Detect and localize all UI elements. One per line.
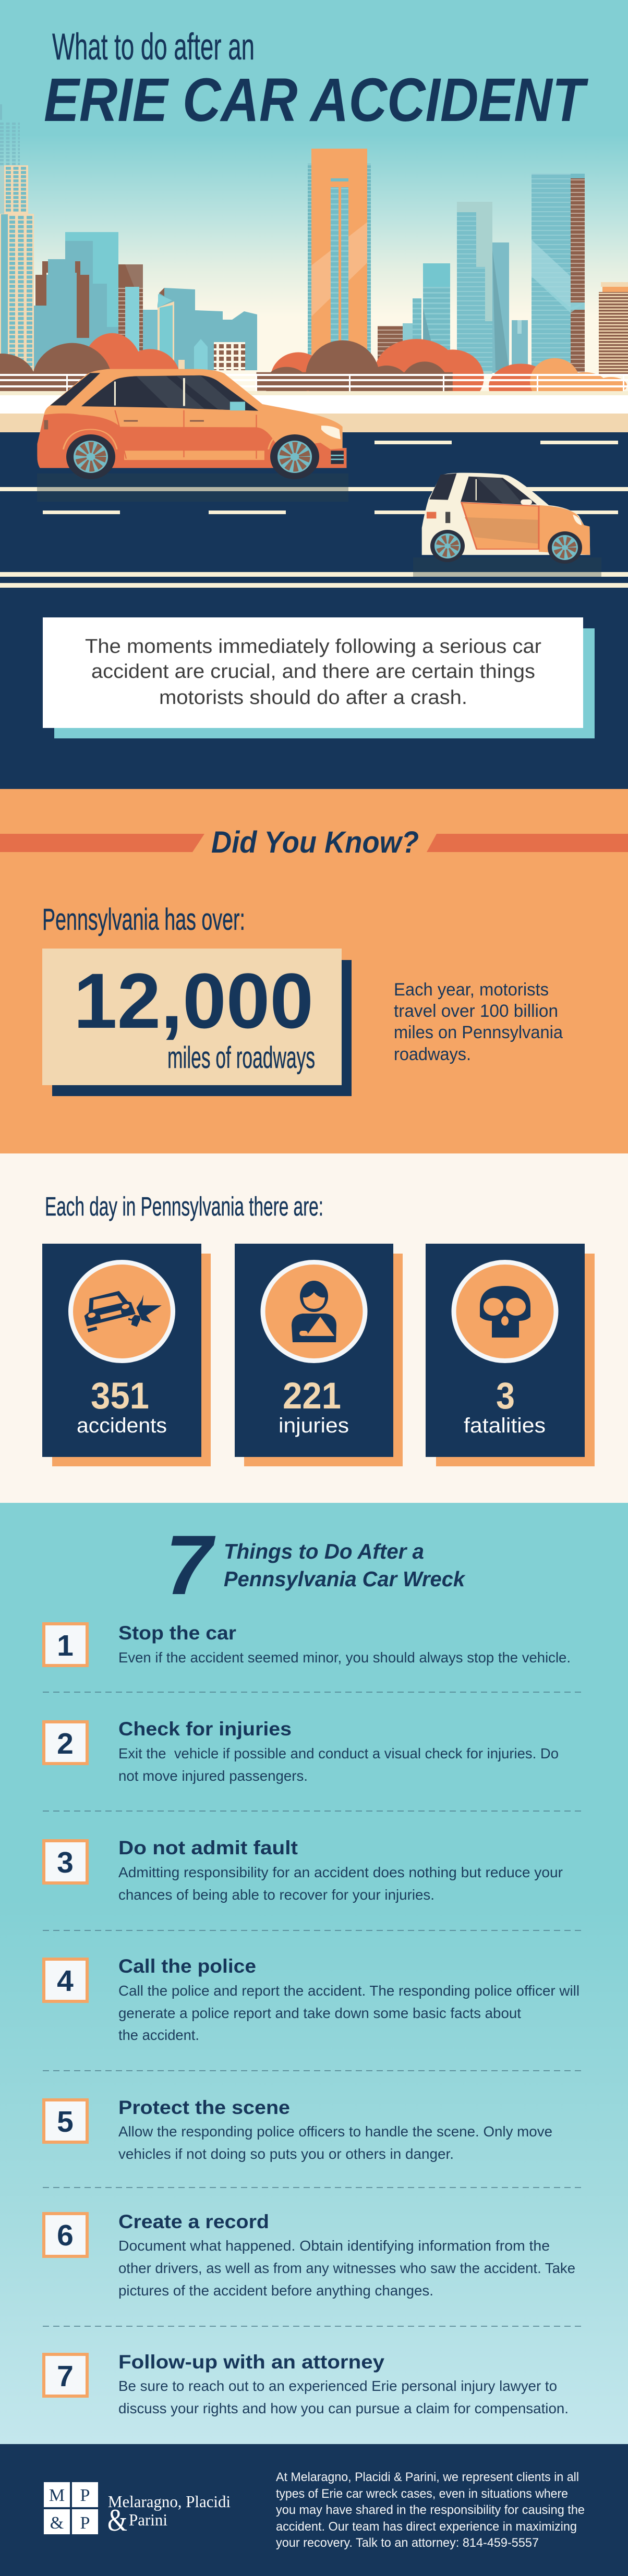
text block: each year — [394, 980, 563, 1064]
step 3: do not admit fault: 3 — [57, 1846, 74, 1879]
stat card: accidents — [42, 1244, 211, 1466]
text block: each year: travel over 100 billion — [394, 1001, 558, 1021]
step 7: follow-up with an attorney — [44, 2351, 569, 2416]
step 4: call the police: 4 — [57, 1964, 74, 1998]
step 1: stop the car — [44, 1622, 571, 1666]
icon: car crash — [84, 1291, 162, 1332]
text block: each year: miles on Pennsylvania — [394, 1023, 563, 1042]
stat card: accidents: accidents — [77, 1414, 167, 1437]
building: orange tower — [308, 149, 371, 373]
stat card: 12,000 miles of roadways — [42, 949, 352, 1096]
step 2: check for injuries: not move injured passengers. — [118, 1768, 308, 1784]
step 6: create a record: pictures of the accident before anything changes. — [118, 2282, 433, 2299]
logo: Melaragno, Placidi & Parini: Parini — [129, 2510, 167, 2529]
stat card: fatalities: fatalities — [464, 1414, 546, 1437]
step 3: do not admit fault — [44, 1837, 563, 1903]
stat card: injuries: 221 — [283, 1376, 341, 1417]
heading: 7 things to do: 7 — [165, 1518, 216, 1612]
panel: intro callout — [43, 617, 595, 738]
text block: intro: motorists should do after a crash. — [159, 687, 467, 709]
stat card: 12,000 miles of roadways: miles of roadways — [167, 1041, 315, 1075]
step 1: stop the car: Even if the accident seemed minor, you should always stop the vehicle. — [118, 1649, 571, 1666]
step 7: follow-up with an attorney: 7 — [57, 2360, 74, 2393]
text block: intro: accident are crucial, and there are certain things — [91, 661, 535, 683]
text block: intro: The moments immediately following a serious car — [85, 636, 541, 658]
road markings — [0, 441, 628, 588]
panel: navy road and intro background — [0, 432, 628, 789]
logo: Melaragno, Placidi & Parini: P — [80, 2486, 90, 2505]
stat card: fatalities: 3 — [496, 1376, 515, 1417]
car shadows — [37, 473, 601, 577]
heading: each day: Each day in Pennsylvania there are: — [45, 1192, 323, 1221]
roadside bands — [0, 391, 628, 432]
step 3: do not admit fault: chances of being able to recover for your injuries. — [118, 1887, 434, 1903]
illustration: large orange car — [37, 369, 346, 479]
panel: hero sky — [0, 0, 628, 396]
step 1: stop the car: Stop the car — [118, 1622, 236, 1644]
building: right small blocks — [378, 263, 450, 360]
step 5: protect the scene: vehicles if not doing so puts you or others in danger. — [118, 2146, 454, 2162]
illustration: small orange and cream car — [422, 473, 590, 564]
step 2: check for injuries: 2 — [57, 1727, 74, 1760]
text block: each year: Each year, motorists — [394, 980, 549, 1000]
step 5: protect the scene: Protect the scene — [118, 2097, 290, 2118]
step 7: follow-up with an attorney: discuss your rights and how you can pursue a claim for compensation. — [118, 2400, 569, 2416]
stat card: accidents: 351 — [91, 1376, 149, 1417]
step 5: protect the scene: Allow the responding police officers to handle the scene. Only move — [118, 2123, 552, 2140]
logo: Melaragno, Placidi & Parini: P — [80, 2513, 90, 2533]
stat card: injuries — [235, 1244, 403, 1466]
step 2: check for injuries: Exit the vehicle if possible and conduct a visual check for injuries. Do — [118, 1745, 559, 1761]
step 6: create a record: Document what happened. Obtain identifying information from the — [118, 2238, 550, 2254]
building: far right — [599, 282, 628, 375]
step 5: protect the scene: 5 — [57, 2105, 74, 2138]
heading: 7 things to do — [165, 1518, 466, 1612]
step 4: call the police: Call the police and report the accident. The responding police officer will — [118, 1983, 579, 1999]
text block: footer about: your recovery. Talk to an attorney: 814-459-5557 — [276, 2536, 539, 2550]
icon: injured person — [292, 1281, 336, 1342]
text block: footer about — [276, 2470, 585, 2550]
building: left tower faded top — [0, 104, 20, 166]
heading: 7 things to do: Things to Do After a — [224, 1539, 424, 1563]
trees — [0, 333, 627, 391]
panel: seven things background — [0, 1503, 628, 2444]
building: middle cluster — [158, 288, 257, 375]
panel: did you know background — [0, 789, 628, 1153]
step 4: call the police: the accident. — [118, 2027, 199, 2043]
step 3: do not admit fault: Admitting responsibility for an accident does nothing but reduce your — [118, 1864, 563, 1880]
panel: footer background — [0, 2444, 628, 2576]
text block: each year: roadways. — [394, 1044, 471, 1064]
building: right tower pair — [457, 202, 528, 374]
step 4: call the police — [44, 1955, 579, 2043]
stat card: injuries: injuries — [279, 1414, 349, 1437]
heading band: did you know — [0, 825, 628, 859]
logo: Melaragno, Placidi & Parini: Melaragno, Placidi — [108, 2492, 231, 2511]
step 4: call the police: generate a police report and take down some basic facts about — [118, 2005, 521, 2021]
fence — [0, 374, 628, 391]
stat card: fatalities — [426, 1244, 595, 1466]
step 1: stop the car: 1 — [57, 1629, 74, 1662]
step 7: follow-up with an attorney: Follow-up with an attorney — [118, 2351, 384, 2373]
text block: footer about: At Melaragno, Placidi & Parini, we represent clients in all — [276, 2470, 579, 2484]
logo: Melaragno, Placidi & Parini — [44, 2482, 231, 2537]
step 2: check for injuries — [44, 1718, 559, 1784]
heading: Pennsylvania has over: Pennsylvania has over: — [42, 903, 245, 937]
step 6: create a record: 6 — [57, 2219, 74, 2252]
text block: footer about: types of Erie car wreck cases, even in situations where — [276, 2487, 568, 2501]
text block: footer about: you may have shared in the responsibility for causing the — [276, 2503, 585, 2517]
wheels: small car — [430, 530, 582, 564]
step 4: call the police: Call the police — [118, 1955, 256, 1977]
panel: daily stats background — [0, 1153, 628, 1503]
heading band: did you know: Did You Know? — [211, 825, 419, 859]
wheels: large car — [66, 434, 319, 479]
building: striped right tower — [532, 174, 585, 372]
step 3: do not admit fault: Do not admit fault — [118, 1837, 298, 1858]
logo: Melaragno, Placidi & Parini: M — [49, 2486, 65, 2505]
building: left tower — [0, 165, 34, 372]
step 6: create a record — [44, 2211, 575, 2299]
icon: skull — [480, 1286, 530, 1338]
logo: Melaragno, Placidi & Parini: & — [107, 2503, 127, 2537]
logo: Melaragno, Placidi & Parini: & — [50, 2513, 64, 2533]
step 2: check for injuries: Check for injuries — [118, 1718, 292, 1740]
heading: 7 things to do: Pennsylvania Car Wreck — [224, 1567, 466, 1591]
text block: intro — [85, 636, 541, 709]
title: What to do after an: What to do after an — [52, 27, 255, 68]
city skyline illustration — [0, 104, 628, 375]
step 6: create a record: other drivers, as well as from any witnesses who saw the accident. Take — [118, 2260, 575, 2276]
stat card: 12,000 miles of roadways: 12,000 — [74, 957, 313, 1044]
step 6: create a record: Create a record — [118, 2211, 269, 2232]
building: left teal cluster — [34, 232, 158, 372]
step 7: follow-up with an attorney: Be sure to reach out to an experienced Erie personal injury lawyer to — [118, 2378, 557, 2394]
text block: footer about: accident. Our team has direct experience in maximizing — [276, 2520, 577, 2534]
step 5: protect the scene — [44, 2097, 552, 2162]
